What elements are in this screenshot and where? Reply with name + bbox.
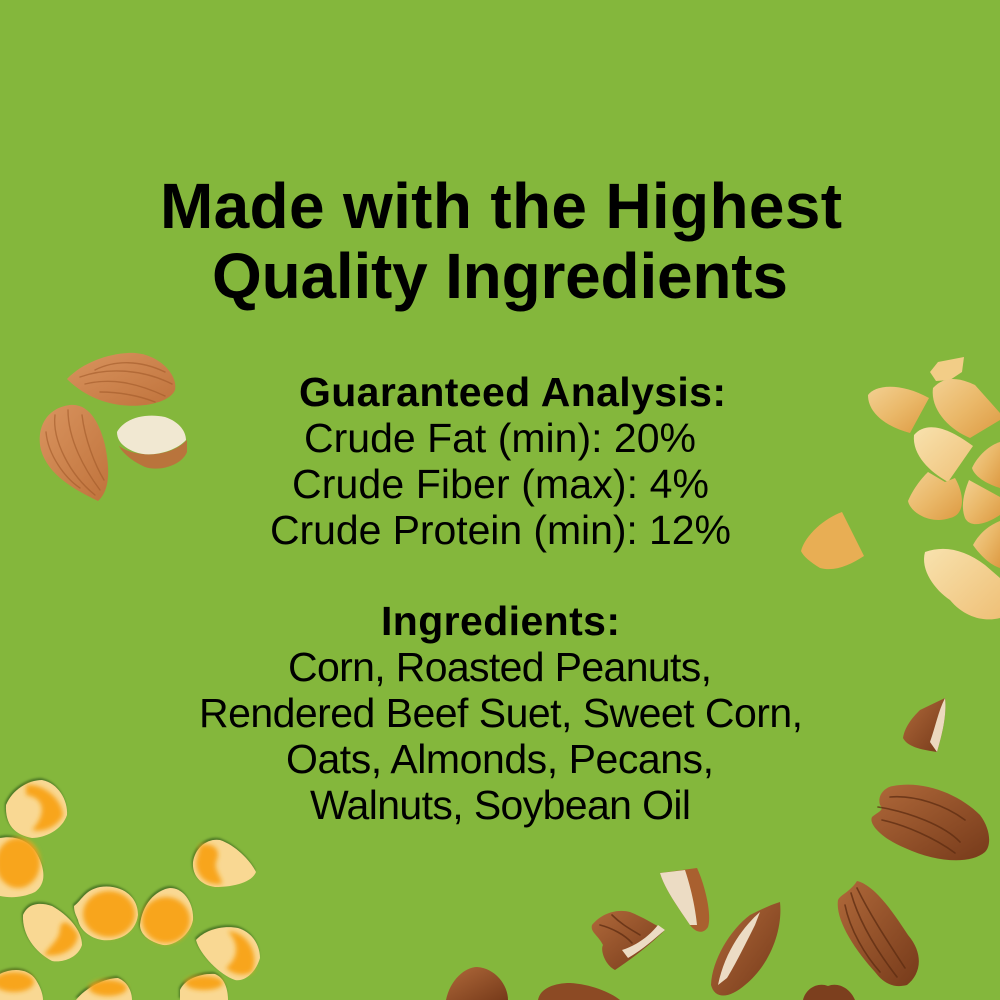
ingredients text block: Ingredients:	[381, 598, 620, 644]
guaranteed analysis text block: Guaranteed Analysis:	[299, 369, 726, 415]
icon: corn kernels	[0, 780, 260, 1000]
guaranteed analysis text block: Crude Fiber (max): 4%	[292, 461, 709, 507]
ingredients text block	[199, 598, 803, 828]
ingredients text block: Oats, Almonds, Pecans,	[286, 736, 714, 782]
icon: pecans	[446, 698, 989, 1000]
guaranteed analysis text block	[270, 369, 731, 553]
guaranteed analysis text block: Crude Protein (min): 12%	[270, 507, 731, 553]
title: Made with the Highest	[160, 170, 842, 242]
ingredients text block: Rendered Beef Suet, Sweet Corn,	[199, 690, 803, 736]
title	[160, 170, 842, 312]
ingredients text block: Walnuts, Soybean Oil	[310, 782, 691, 828]
ingredients text block: Corn, Roasted Peanuts,	[288, 644, 712, 690]
title: Quality Ingredients	[212, 240, 788, 312]
guaranteed analysis text block: Crude Fat (min): 20%	[304, 415, 696, 461]
icon: peanuts	[801, 357, 1000, 619]
icon: almonds	[40, 353, 187, 501]
